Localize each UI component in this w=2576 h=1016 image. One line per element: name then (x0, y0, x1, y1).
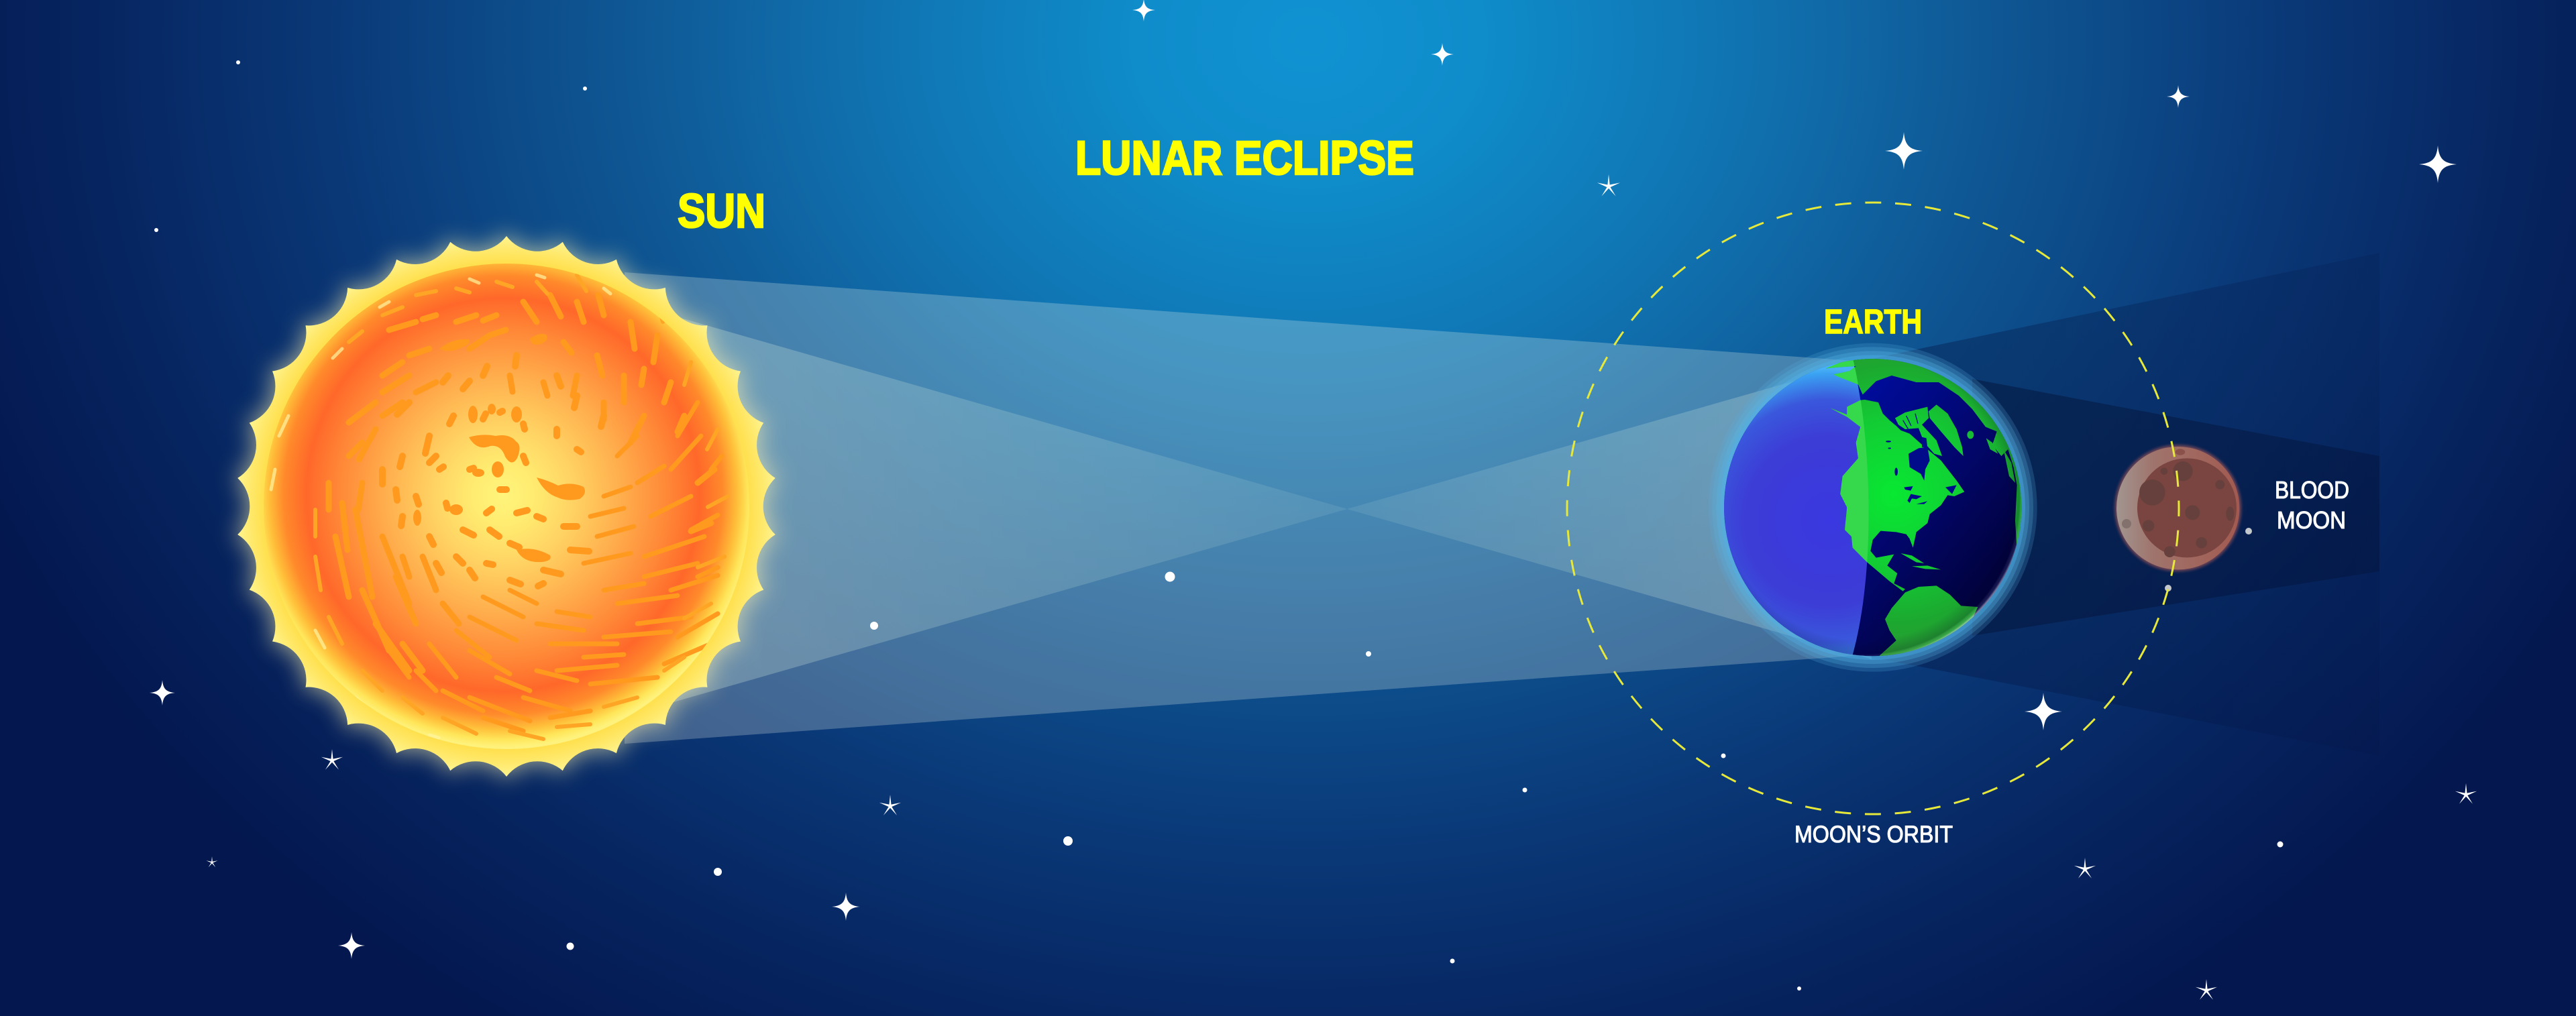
land: arctic and eurasia crescent (1826, 359, 2023, 550)
label: moon's orbit: MOON’S ORBIT (1794, 822, 1953, 848)
blood moon (2114, 445, 2241, 571)
title: LUNAR ECLIPSE (1075, 132, 1414, 185)
shadow: inner umbra (1972, 379, 2379, 636)
moon: dark umbra disc (2137, 458, 2237, 557)
sun: outer glow (237, 236, 775, 777)
flares: core speckles (382, 355, 604, 586)
label: blood moon (2275, 476, 2349, 534)
earth: daylit land tint (1826, 359, 2023, 657)
land: iceland (1967, 431, 1974, 439)
sun: disc (264, 264, 749, 749)
moon: craters (2122, 449, 2234, 557)
five-point stars (206, 174, 2477, 1000)
earth (1709, 343, 2037, 672)
moon: red glow (2114, 445, 2241, 571)
earth: daylit hemisphere (1723, 360, 1869, 655)
dot stars (154, 60, 2284, 991)
moon's orbit: dashed ring (1567, 203, 2179, 814)
labels (678, 132, 2349, 848)
label: earth: EARTH (1824, 302, 1922, 341)
flares: swirl streaks (389, 402, 722, 731)
light beams from sun to earth (625, 272, 1872, 744)
land: greenland (1929, 404, 1964, 456)
earth: lakes and inland water (1886, 414, 1957, 504)
land: north and central america (1830, 400, 1964, 591)
land: canadian arctic islands (1895, 407, 1942, 456)
sun: surface flares (271, 275, 728, 739)
earth: atmosphere halo (1709, 343, 2037, 672)
flares: large central blobs (413, 334, 585, 562)
land: european fragments (1986, 438, 2015, 483)
beam: left cross triangle near sun (674, 316, 1347, 702)
shadow: outer penumbra (1865, 253, 2379, 756)
label: blood moon: MOON (2277, 506, 2346, 534)
earth: dark ocean (1724, 359, 2021, 656)
label: sun: SUN (678, 185, 765, 238)
earth shadow cones (1865, 253, 2379, 756)
earth: globe (1723, 359, 2023, 657)
beam: outer penumbra trapezoid (625, 272, 1872, 744)
earth: limb shading (1724, 359, 2021, 656)
label: blood moon: BLOOD (2275, 476, 2349, 504)
beam: right cross triangle toward earth (1347, 359, 1872, 659)
land: caribbean islands (1900, 553, 1941, 569)
sun: scalloped corona (237, 236, 775, 777)
sun (237, 236, 775, 777)
land: south america (1878, 585, 1978, 657)
moon: lit body (2116, 447, 2239, 569)
earth: continents (1826, 359, 2023, 657)
